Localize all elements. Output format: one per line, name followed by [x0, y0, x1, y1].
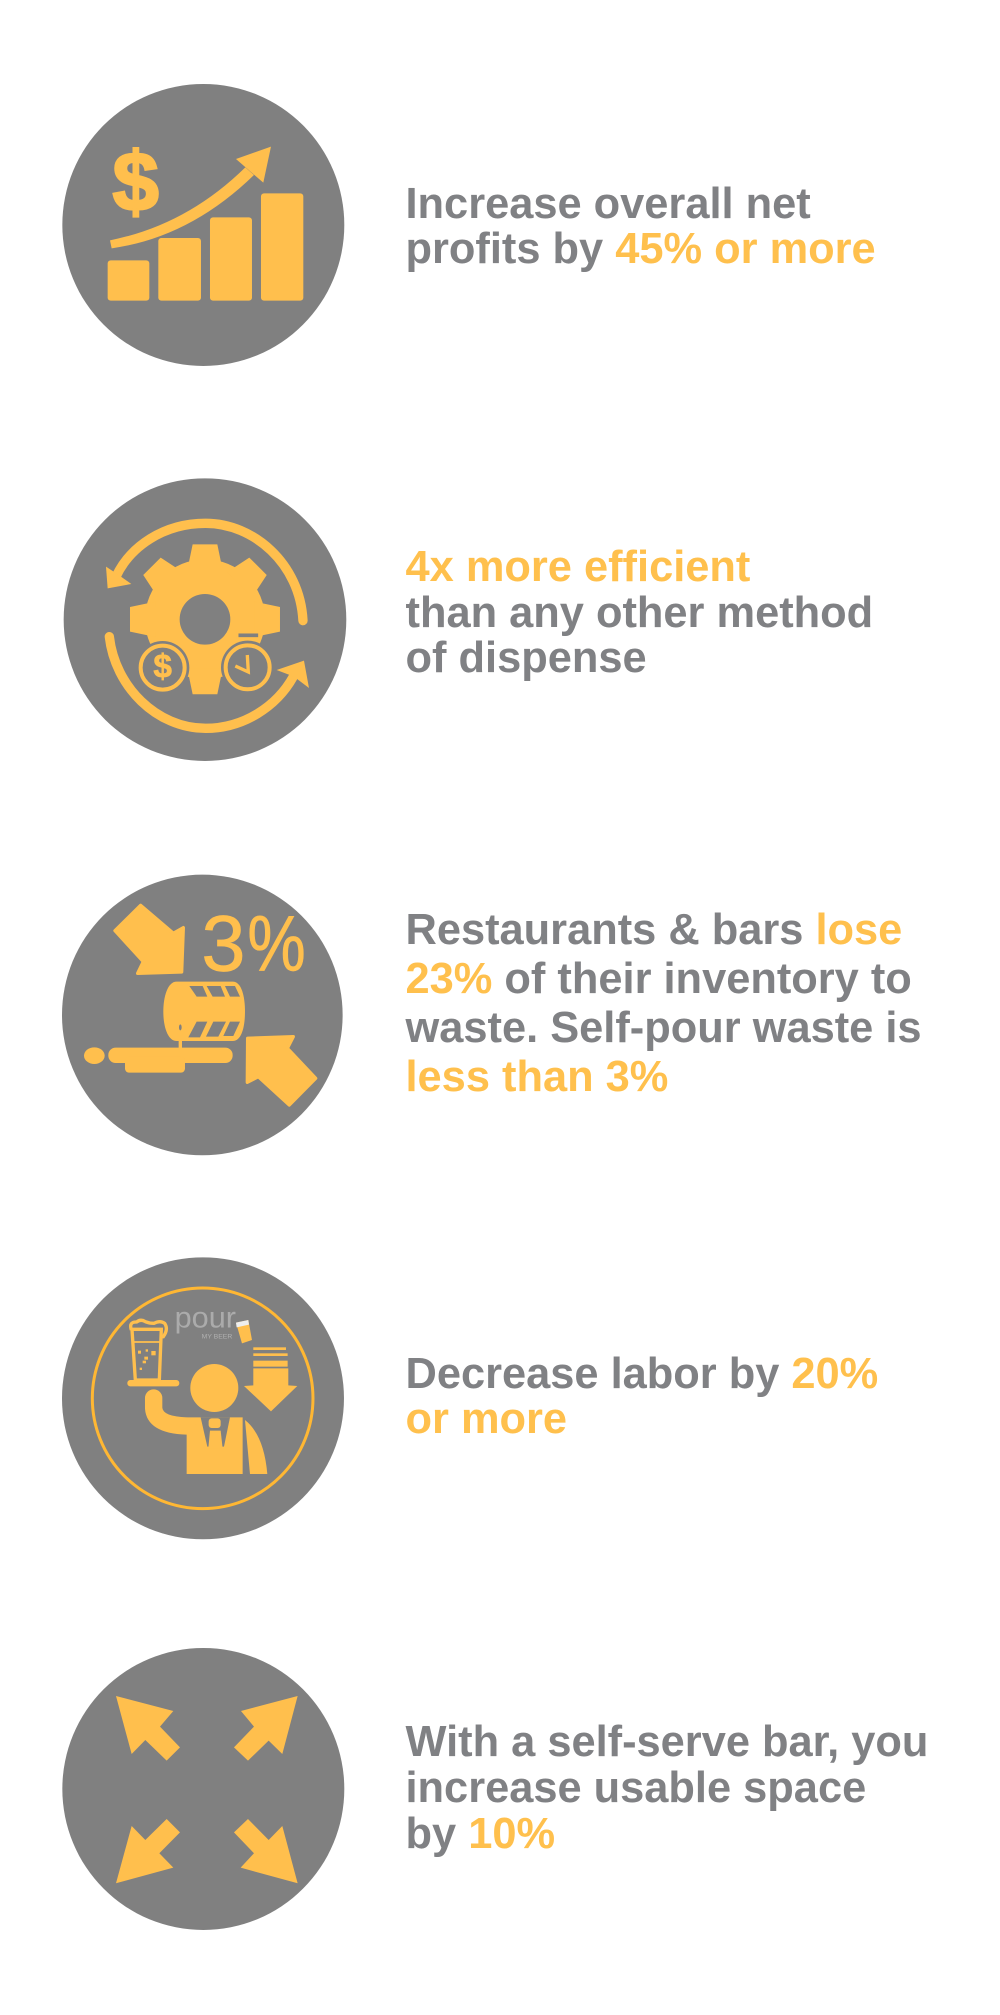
- down arrow: [244, 1347, 297, 1411]
- text: usable space: by 10%: [406, 1810, 555, 1858]
- icon: profit growth chart: [62, 84, 344, 366]
- text: efficiency: 4x more efficient: [406, 543, 750, 591]
- text: net profits: Increase overall net: [406, 180, 811, 228]
- text: labor: Decrease labor by 20%: [406, 1350, 878, 1398]
- panel: waste: [62, 875, 922, 1155]
- icon: spilling barrel with arrows: [62, 875, 343, 1155]
- logo: pour my beer: [175, 1301, 252, 1343]
- icon: four outward arrows: [62, 1648, 344, 1930]
- waiter figure: [187, 1364, 267, 1474]
- icon: gear with cycle arrows: [64, 478, 346, 761]
- text: efficiency: of dispense: [406, 634, 647, 682]
- text: usable space: With a self-serve bar, you: [406, 1718, 928, 1766]
- text: waste: less than 3%: [406, 1053, 668, 1101]
- icon: waiter with beer tray: [62, 1257, 344, 1539]
- logo: pour my beer: MY BEER: [202, 1335, 233, 1341]
- panel: labor: [62, 1257, 878, 1539]
- panel: net profits: [62, 84, 876, 366]
- text: labor: or more: [406, 1395, 567, 1443]
- text: waste: 23%: [406, 955, 492, 1003]
- icon: gear with cycle arrows: $: [153, 648, 172, 685]
- text: waste: of their inventory to: [492, 955, 912, 1003]
- text: waste: waste. Self-pour waste is: [404, 1004, 922, 1052]
- beer mug on tray: [131, 1320, 166, 1380]
- panel: usable space: [62, 1648, 928, 1930]
- panel: efficiency: [64, 478, 873, 761]
- icon: spilling barrel with arrows: %: [247, 898, 306, 987]
- icon: profit growth chart: $: [112, 136, 159, 229]
- logo: pour my beer: pour: [175, 1301, 236, 1334]
- text: waste: Restaurants & bars lose: [406, 906, 902, 954]
- text: net profits: profits by 45% or more: [406, 225, 876, 273]
- text: efficiency: than any other method: [406, 589, 873, 637]
- icon: spilling barrel with arrows: 3: [201, 898, 245, 987]
- text: usable space: increase usable space: [406, 1764, 866, 1812]
